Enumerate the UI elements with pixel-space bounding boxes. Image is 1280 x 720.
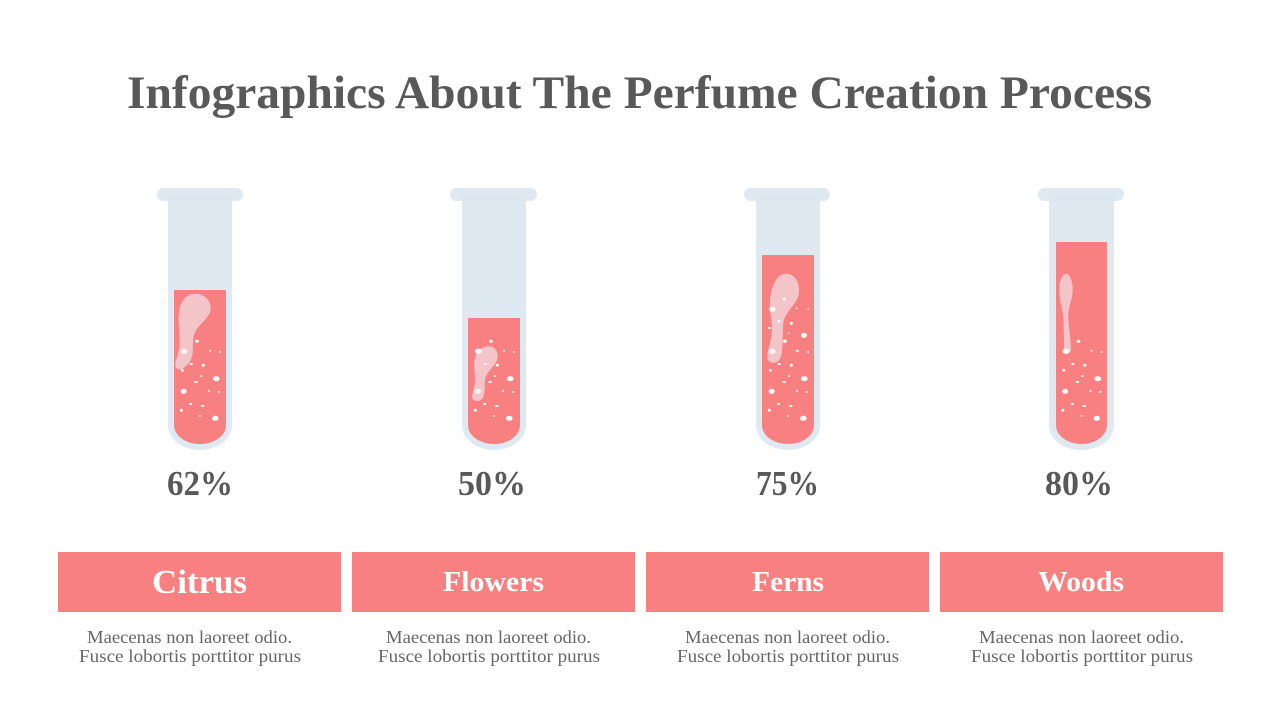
description: citrus: Maecenas non laoreet odio. <box>87 627 292 647</box>
description: woods: Fusce lobortis porttitor purus <box>971 646 1193 666</box>
label: flowers: Flowers <box>443 567 544 598</box>
label: woods: Woods <box>1038 567 1124 598</box>
label: ferns <box>646 552 929 612</box>
percentage: 50%: 50% <box>458 464 526 503</box>
label: woods <box>940 552 1223 612</box>
percentage: 80%: 80% <box>1045 464 1113 503</box>
description: flowers: Fusce lobortis porttitor purus <box>378 646 600 666</box>
description: ferns: Maecenas non laoreet odio. <box>685 627 890 647</box>
description: woods: Maecenas non laoreet odio. <box>979 627 1184 647</box>
label: flowers <box>352 552 635 612</box>
title: Infographics About The Perfume Creation Process <box>127 67 1152 119</box>
description: flowers: Maecenas non laoreet odio. <box>386 627 591 647</box>
test tube: flowers 50% <box>450 188 537 450</box>
label: citrus: Citrus <box>152 564 247 601</box>
description: ferns <box>677 627 899 666</box>
description: citrus <box>79 627 301 666</box>
description: woods <box>971 627 1193 666</box>
percentage: 62%: 62% <box>167 464 233 503</box>
description: ferns: Fusce lobortis porttitor purus <box>677 646 899 666</box>
test tube: woods 80% <box>1038 188 1124 450</box>
description: citrus: Fusce lobortis porttitor purus <box>79 646 301 666</box>
test tube: citrus 62% <box>157 188 243 450</box>
test tube: ferns 75% <box>744 188 830 450</box>
label: ferns: Ferns <box>752 567 824 598</box>
description: flowers <box>378 627 600 666</box>
percentage: 75%: 75% <box>756 464 819 503</box>
label: citrus <box>58 552 341 612</box>
